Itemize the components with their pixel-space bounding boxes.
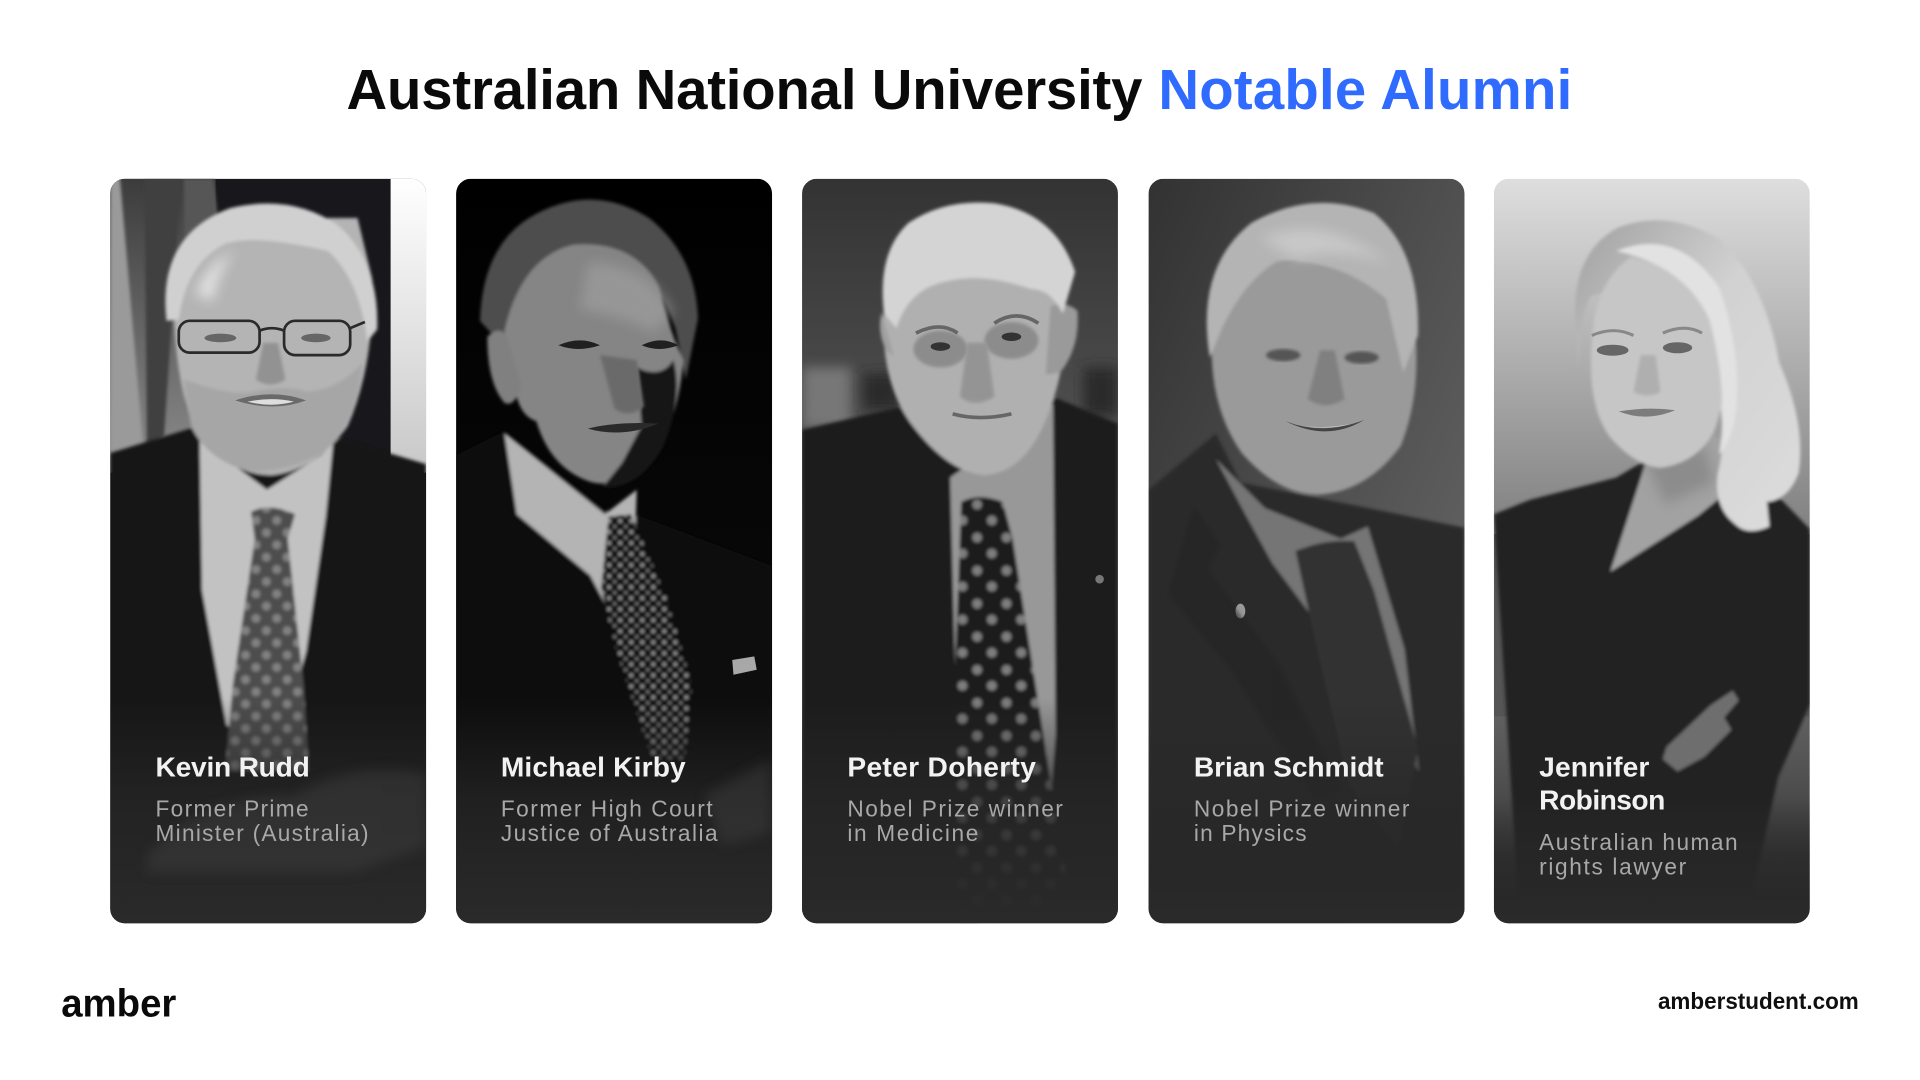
name: Brian Schmidt: Brian Schmidt (1194, 751, 1384, 782)
name: Peter Doherty: Peter Doherty (847, 751, 1036, 782)
portrait: Peter Doherty (802, 179, 1118, 931)
bottom fade (1149, 698, 1464, 924)
bottom fade (456, 698, 773, 924)
bottom fade (110, 698, 426, 924)
website: amberstudent.com (1658, 988, 1859, 1014)
role: Kevin Rudd: Former Prime (156, 796, 309, 822)
portrait: Brian Schmidt (1149, 179, 1464, 923)
role: Peter Doherty: in Medicine (847, 820, 978, 846)
panel: Michael Kirby card (456, 179, 773, 924)
hand (709, 764, 770, 840)
title: Australian National University (347, 58, 1143, 121)
role: Michael Kirby: Former High Court (501, 796, 713, 822)
panel: Jennifer Robinson card (1494, 179, 1810, 924)
panel: Kevin Rudd card (110, 179, 426, 924)
role: Peter Doherty: Nobel Prize winner (847, 796, 1063, 822)
portrait: Kevin Rudd (110, 179, 426, 923)
title: Notable Alumni (1158, 58, 1572, 121)
role: Brian Schmidt: Nobel Prize winner (1194, 796, 1410, 822)
logo: amber: amber (61, 982, 176, 1025)
panel: Brian Schmidt card (1149, 179, 1464, 924)
name: Kevin Rudd: Kevin Rudd (156, 751, 310, 782)
hands (147, 770, 426, 872)
role: Jennifer Robinson: Australian human (1539, 829, 1738, 855)
role: Brian Schmidt (1194, 796, 1410, 846)
role: Kevin Rudd: Minister (Australia) (156, 820, 369, 846)
bottom fade (1494, 810, 1810, 924)
panel: Peter Doherty card (802, 179, 1118, 931)
bottom fade (802, 698, 1118, 924)
role: Michael Kirby: Justice of Australia (501, 820, 718, 846)
portrait: Jennifer Robinson (1494, 179, 1810, 924)
title (347, 58, 1572, 121)
role: Peter Doherty (847, 796, 1063, 846)
name: Jennifer Robinson: Robinson (1539, 784, 1665, 815)
role: Jennifer Robinson: rights lawyer (1539, 853, 1687, 879)
portrait: Michael Kirby (456, 179, 773, 923)
name: Michael Kirby: Michael Kirby (501, 751, 686, 782)
role: Jennifer Robinson (1539, 829, 1738, 879)
role: Kevin Rudd (156, 796, 369, 846)
name: Jennifer Robinson: Jennifer (1539, 751, 1649, 782)
role: Michael Kirby (501, 796, 718, 846)
name: Jennifer Robinson (1539, 751, 1665, 815)
role: Brian Schmidt: in Physics (1194, 820, 1307, 846)
